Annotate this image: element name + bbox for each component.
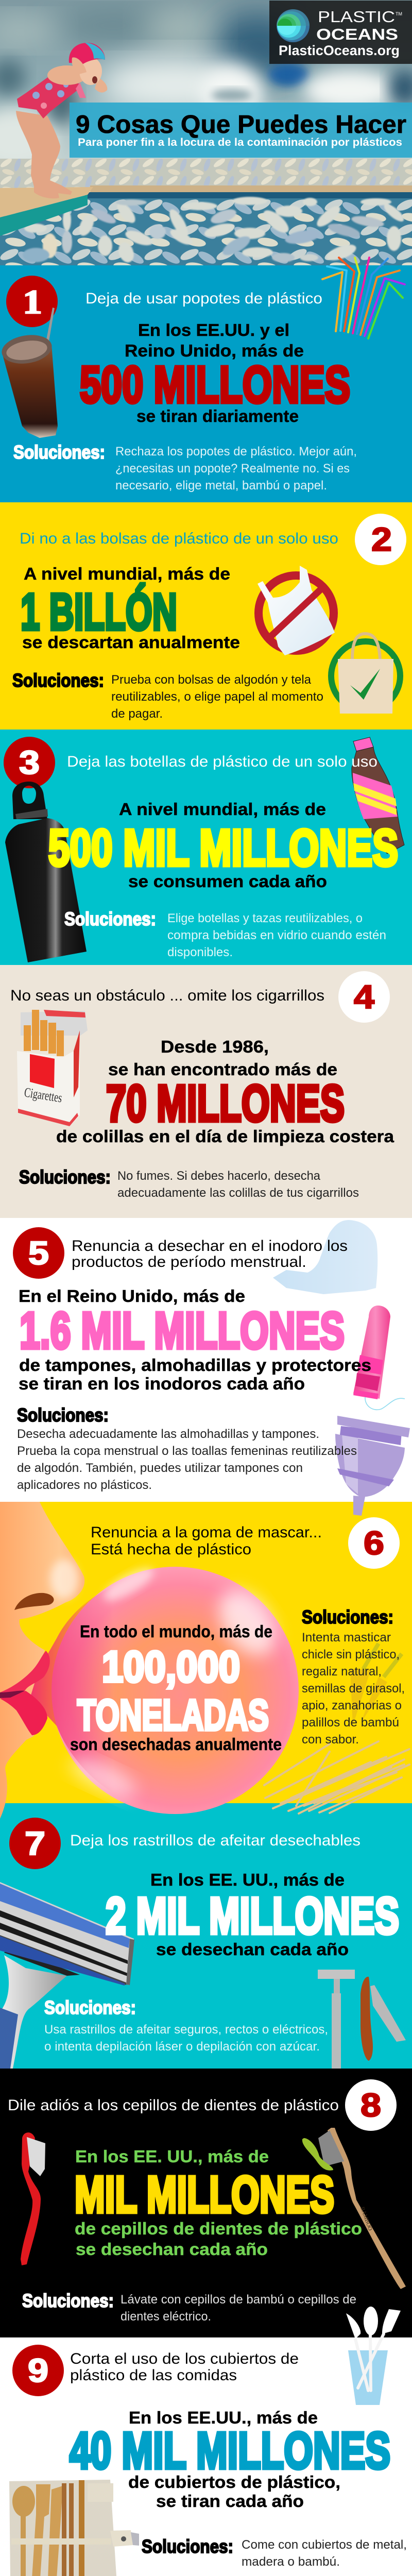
badge 4: 4	[354, 978, 374, 1015]
panel: 4 cigarettes	[10, 971, 394, 1200]
icon: bamboo toothbrush: BAMBOO	[359, 2206, 373, 2231]
solutions	[64, 908, 386, 959]
solutions: semillas de girasol,	[302, 1682, 405, 1696]
solutions: reutilizables, o elige papel al momento	[111, 690, 323, 704]
header: Di no a las bolsas de plástico de un solo uso	[20, 530, 338, 547]
logo box: PlasticOceans.org	[279, 43, 400, 58]
badge 3: 3	[19, 744, 40, 781]
badge 1: 1	[23, 283, 42, 321]
icon: bamboo cutlery kit	[6, 2480, 139, 2576]
badge 7: 7	[25, 1825, 45, 1862]
icon: reusable bag with check	[331, 634, 400, 714]
icon: bamboo toothbrush	[302, 2128, 406, 2289]
header: plástico de las comidas	[70, 2367, 237, 2384]
icon: coloured straws	[322, 258, 405, 338]
statistic: de tampones, almohadillas y protectores	[19, 1355, 371, 1375]
panel: hero photo and title	[0, 0, 412, 265]
icon: glass of cola with metal straw	[0, 308, 58, 438]
statistic: se desechan cada año	[156, 1940, 349, 1959]
panel: 7 razors	[0, 1818, 406, 2069]
subheading: Para poner fin a la locura de la contaminación por plásticos	[78, 137, 402, 148]
hero: green side tiles	[0, 195, 88, 236]
solutions: aplicadores no plásticos.	[17, 1478, 152, 1492]
statistic	[75, 2147, 362, 2259]
hero: child on the edge	[16, 43, 107, 198]
solutions: Usa rastrillos de afeitar seguros, rectos o eléctricos,	[44, 2023, 328, 2037]
panel: 2 bags	[12, 514, 406, 721]
solutions: Prueba con bolsas de algodón y tela	[111, 673, 312, 687]
solutions: de pagar.	[111, 707, 163, 721]
solutions: Soluciones:	[44, 1997, 136, 2018]
header: No seas un obstáculo ... omite los cigarrillos	[10, 987, 324, 1004]
solutions	[19, 1166, 359, 1200]
statistic: En todo el mundo, más de	[80, 1622, 272, 1641]
icon: prohibited plastic bag	[258, 566, 335, 655]
solutions: Soluciones:	[64, 908, 156, 929]
heading: 9 Cosas Que Puedes Hacer	[76, 111, 406, 139]
solutions: Soluciones:	[17, 1404, 109, 1426]
statistic: se consumen cada año	[128, 872, 327, 891]
statistic: En los EE. UU., más de	[75, 2147, 269, 2166]
statistic: se tiran diariamente	[136, 406, 299, 426]
icon: cigarette pack: Cigarettes	[23, 1084, 63, 1106]
solutions: chicle sin plástico,	[302, 1648, 400, 1662]
header: Deja los rastrillos de afeitar desechables	[70, 1832, 360, 1849]
badge 2	[355, 514, 406, 565]
panel: 9 cutlery	[6, 2307, 407, 2576]
solutions: No fumes. Si debes hacerlo, desecha	[117, 1169, 321, 1183]
hero: bottle heap on the horizon	[0, 159, 412, 189]
solutions: ¿necesitas un popote? Realmente no. Si es	[115, 462, 350, 476]
header: Renuncia a desechar en el inodoro los	[72, 1238, 348, 1255]
statistic: En los EE. UU., más de	[150, 1870, 345, 1889]
icon: carrots	[350, 1643, 402, 1726]
statistic: En el Reino Unido, más de	[19, 1286, 245, 1306]
header: Está hecha de plástico	[91, 1541, 251, 1558]
solutions: madera o bambú.	[242, 2555, 340, 2569]
statistic	[21, 564, 240, 652]
statistic: Reino Unido, más de	[125, 341, 304, 360]
solutions: compra bebidas en vidrio cuando estén	[167, 928, 386, 942]
statistic: A nivel mundial, más de	[119, 800, 326, 819]
badge 8	[345, 2079, 397, 2131]
hero: pool rim	[90, 185, 412, 192]
solutions: de algodón. También, puedes utilizar tampones con	[17, 1461, 303, 1475]
badge 5: 5	[28, 1234, 49, 1272]
solutions	[17, 1404, 357, 1492]
solutions: disponibles.	[167, 945, 233, 959]
solutions	[22, 2290, 356, 2324]
hero: pool deck	[0, 187, 93, 217]
panel: 5 period products	[13, 1220, 410, 1516]
logo box: TM	[396, 11, 402, 16]
statistic	[80, 320, 350, 426]
solutions: Intenta masticar	[302, 1631, 391, 1645]
solutions: con sabor.	[302, 1733, 359, 1747]
solutions	[12, 670, 323, 721]
solutions: Desecha adecuadamente las almohadillas y tampones.	[17, 1427, 319, 1441]
panel: 6 chewing gum	[0, 1502, 409, 1819]
statistic: TONELADAS	[77, 1691, 269, 1739]
icon: cigarette pack	[17, 1010, 88, 1126]
icon: toothpicks	[264, 1741, 409, 1814]
icon: nose and lips	[0, 1502, 84, 1819]
solutions: Come con cubiertos de metal,	[242, 2538, 407, 2552]
badge 3	[4, 737, 55, 788]
solutions: Prueba la copa menstrual o las toallas femeninas reutilizables	[17, 1444, 357, 1458]
solutions: Soluciones:	[22, 2290, 114, 2311]
hero: pool tiles	[85, 192, 412, 205]
icon: red plastic toothbrush	[21, 2132, 45, 2265]
icon: black reusable bottle	[5, 782, 87, 962]
statistic: son desechadas anualmente	[70, 1735, 282, 1754]
badge 6	[348, 1517, 400, 1569]
solutions	[44, 1997, 328, 2054]
statistic	[19, 1286, 371, 1393]
solutions: palillos de bambú	[302, 1716, 399, 1730]
statistic: 100,000	[102, 1642, 240, 1691]
badge 8: 8	[360, 2087, 381, 2124]
icon: soda bottle	[352, 737, 404, 854]
solutions: regaliz natural,	[302, 1665, 382, 1679]
solutions: necesario, elige metal, bambú o papel.	[115, 479, 327, 493]
badge 9: 9	[28, 2352, 48, 2389]
solutions: Soluciones:	[12, 670, 104, 691]
icon: bubble gum bubble	[26, 1562, 299, 1814]
statistic: de colillas en el día de limpieza costera	[56, 1127, 394, 1146]
logo box: OCEANS	[316, 25, 398, 43]
icon: safety razor	[318, 1970, 355, 2069]
panel: 3 bottles	[4, 737, 404, 962]
icon: straight razor	[360, 1977, 406, 2061]
title banner	[70, 103, 412, 158]
logo box: PLASTIC	[318, 8, 395, 26]
icon: tampon	[353, 1306, 405, 1410]
header: Deja las botellas de plástico de un solo uso	[67, 753, 377, 770]
statistic: En los EE.UU., más de	[129, 2408, 318, 2427]
badge 9	[12, 2345, 64, 2396]
icon: disposable razor	[0, 1882, 134, 2069]
solutions: dientes eléctrico.	[121, 2310, 211, 2324]
header: Renuncia a la goma de mascar...	[91, 1524, 322, 1541]
statistic	[56, 1037, 394, 1146]
logo box	[269, 1, 412, 64]
badge 2: 2	[371, 521, 392, 558]
statistic: En los EE.UU. y el	[138, 320, 289, 340]
solutions: Soluciones:	[142, 2536, 233, 2557]
statistic	[106, 1870, 399, 1959]
solutions: Soluciones:	[13, 442, 105, 463]
solutions: adecuadamente las colillas de tus cigarrillos	[117, 1186, 359, 1200]
badge 6: 6	[364, 1524, 384, 1562]
statistic: se desechan cada año	[76, 2240, 268, 2259]
hero background: cloudy sky	[0, 0, 412, 170]
solutions	[13, 442, 357, 493]
header: productos de período menstrual.	[72, 1253, 306, 1270]
panel: 8 toothbrushes	[8, 2079, 406, 2324]
solutions: o intenta depilación láser o depilación con azúcar.	[44, 2040, 320, 2054]
badge 5	[13, 1227, 64, 1279]
badge 7	[9, 1818, 61, 1869]
statistic: se descartan anualmente	[22, 633, 240, 652]
solutions: apio, zanahorias o	[302, 1699, 402, 1713]
statistic: Desde 1986,	[161, 1037, 269, 1056]
solutions	[302, 1606, 405, 1747]
statistic: se tiran en los inodoros cada año	[19, 1374, 305, 1393]
solutions: Rechaza los popotes de plástico. Mejor aún,	[115, 445, 357, 459]
statistic: de cepillos de dientes de plástico	[75, 2219, 362, 2238]
statistic	[70, 1622, 282, 1754]
solutions: Soluciones:	[302, 1606, 393, 1628]
icon: Plastic Oceans logo	[277, 9, 310, 42]
solutions: Lávate con cepillos de bambú o cepillos de	[121, 2293, 356, 2307]
icon: plastic cup with cutlery	[346, 2307, 401, 2405]
header: Deja de usar popotes de plástico	[85, 290, 322, 307]
solutions: Soluciones:	[19, 1166, 111, 1188]
hero: floating plastic bottles	[23, 197, 406, 265]
statistic: se han encontrado más de	[108, 1060, 337, 1079]
statistic	[48, 800, 398, 891]
header: Dile adiós a los cepillos de dientes de plástico	[8, 2097, 339, 2114]
icon: menstrual cup	[335, 1416, 410, 1516]
solutions: Elige botellas y tazas reutilizables, o	[167, 911, 363, 925]
header	[91, 1524, 322, 1558]
badge 1	[6, 276, 58, 327]
icon: sanitary pad	[273, 1220, 377, 1294]
panel: 1 straws	[0, 258, 405, 493]
statistic: A nivel mundial, más de	[24, 564, 230, 583]
badge 4	[338, 971, 390, 1023]
header	[72, 1238, 348, 1270]
header	[70, 2350, 299, 2384]
statistic: de cubiertos de plástico,	[128, 2472, 340, 2492]
solutions	[142, 2536, 407, 2569]
statistic: se tiran cada año	[156, 2492, 304, 2511]
statistic: 1 BILLÓN	[21, 583, 177, 641]
header: Corta el uso de los cubiertos de	[70, 2350, 299, 2367]
statistic	[70, 2408, 390, 2511]
hero: pool water	[0, 198, 412, 265]
